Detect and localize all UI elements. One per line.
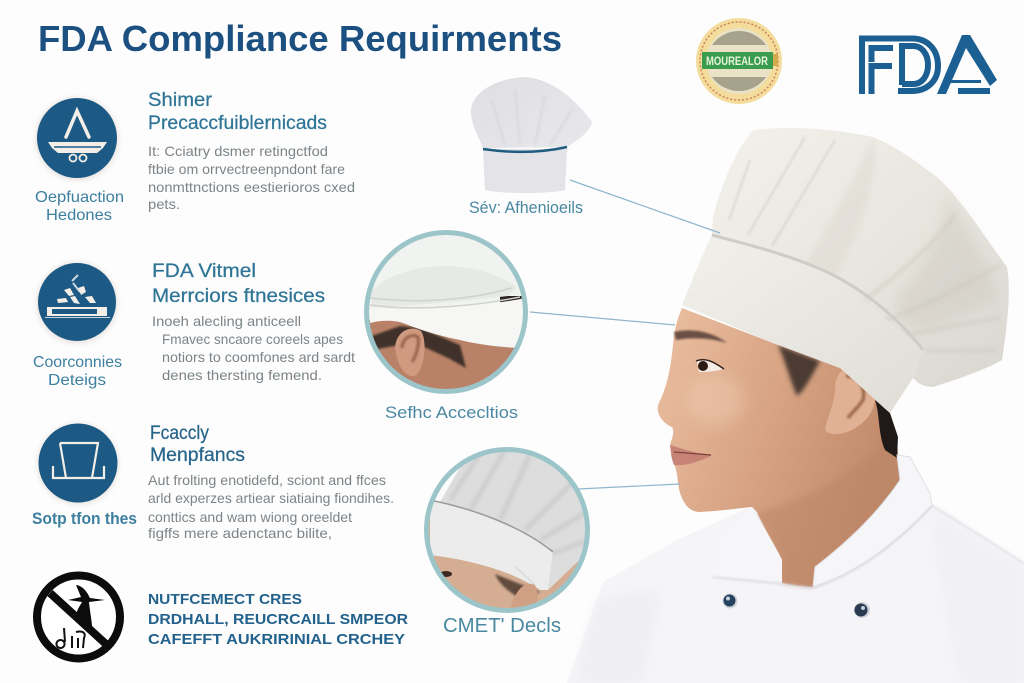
leader line: [578, 484, 680, 489]
icon label: Coorconnies: [33, 354, 122, 371]
icon: tools on bench: [37, 263, 117, 343]
enforcement text: DRDHALL, REUCRCAILL SMPEOR: [148, 611, 408, 628]
enforcement text: NUTFCEMECT CRES: [148, 591, 302, 608]
caption: Sefhc Accecltios: [385, 403, 518, 422]
certification seal: MOUREALOR: [706, 56, 769, 68]
caption: Sév: Afhenioeils: [469, 198, 583, 217]
neck and face: [658, 308, 900, 587]
body text: notiors to coomfones ard sardt: [162, 349, 355, 365]
body text: Fmavec sncaore coreels apes: [162, 331, 343, 347]
panel: requirement 3: [32, 423, 394, 541]
photo: chef in profile: [567, 128, 1024, 683]
FDA logo: [862, 35, 997, 94]
body text: conttics and wam wiong oreeldet: [148, 509, 352, 525]
jacket buttons: [722, 594, 870, 618]
panel: enforcement: [37, 576, 408, 658]
title: FDA Compliance Requirments: [38, 18, 562, 59]
body text: nonmttnctions eestierioros cxed: [148, 179, 355, 195]
callout: hat fit at ear: [366, 232, 675, 422]
heading: [152, 261, 325, 307]
body text: denes thersting femend.: [162, 367, 322, 383]
enforcement text: CAFEFFT AUKRIRINIAL CRCHEY: [148, 631, 405, 648]
heading: Merrciors ftnesices: [152, 286, 325, 307]
body text: Aut frolting enotidefd, sciont and ffces: [148, 472, 386, 488]
leader line: [530, 312, 675, 325]
jacket collar: [712, 455, 932, 618]
icon label: Oepfuaction: [35, 189, 124, 206]
eyebrow: [674, 330, 727, 343]
icon label: [35, 189, 124, 224]
icon label: Hedones: [46, 207, 112, 224]
panel: requirement 2: [33, 261, 355, 389]
body text: [148, 143, 355, 212]
circle detail: [366, 232, 526, 395]
heading: Fcaccly: [150, 423, 209, 444]
eye: [697, 360, 723, 372]
large chef hat: [682, 128, 1009, 413]
panel: requirement 1: [35, 90, 355, 224]
ear: [825, 369, 875, 434]
circle detail: [426, 449, 590, 612]
chef jacket: [567, 455, 1024, 683]
heading: FDA Vitmel: [152, 261, 256, 282]
hat band: [682, 235, 923, 413]
heading: Shimer: [148, 90, 213, 111]
body text: [148, 472, 394, 541]
lips: [670, 445, 712, 465]
icon label: Deteigs: [48, 372, 106, 389]
heading: [150, 423, 245, 466]
body text: It: Cciatry dsmer retingctfod: [148, 143, 328, 159]
hair: [778, 345, 820, 396]
icon: prohibition sign: [37, 576, 120, 658]
icon: container outline: [38, 424, 118, 504]
icon label: Sotp tfon thes: [32, 510, 137, 528]
icon: boat and peak: [36, 98, 118, 180]
body text: pets.: [148, 196, 180, 212]
body text: ftbie om orrvectreenpndont fare: [148, 161, 345, 177]
callout: hat crown detail: [426, 449, 680, 637]
small chef hat: [471, 77, 592, 193]
heading: Precaccfuiblernicads: [148, 113, 327, 134]
body text: figffs mere adenctanc bilite,: [148, 525, 332, 541]
body text: Inoeh alecling anticeell: [152, 313, 301, 329]
body text: [152, 313, 355, 383]
icon label: [33, 354, 122, 389]
certification seal: [696, 18, 782, 104]
body text: arld experzes artiear siatiaing fiondihes.: [148, 490, 394, 506]
enforcement text: [148, 591, 408, 648]
leader line: [570, 180, 720, 233]
callout: small hat: [469, 77, 720, 233]
caption: CMET' Decls: [443, 615, 561, 637]
heading: [148, 90, 327, 134]
heading: Menpfancs: [150, 445, 245, 466]
